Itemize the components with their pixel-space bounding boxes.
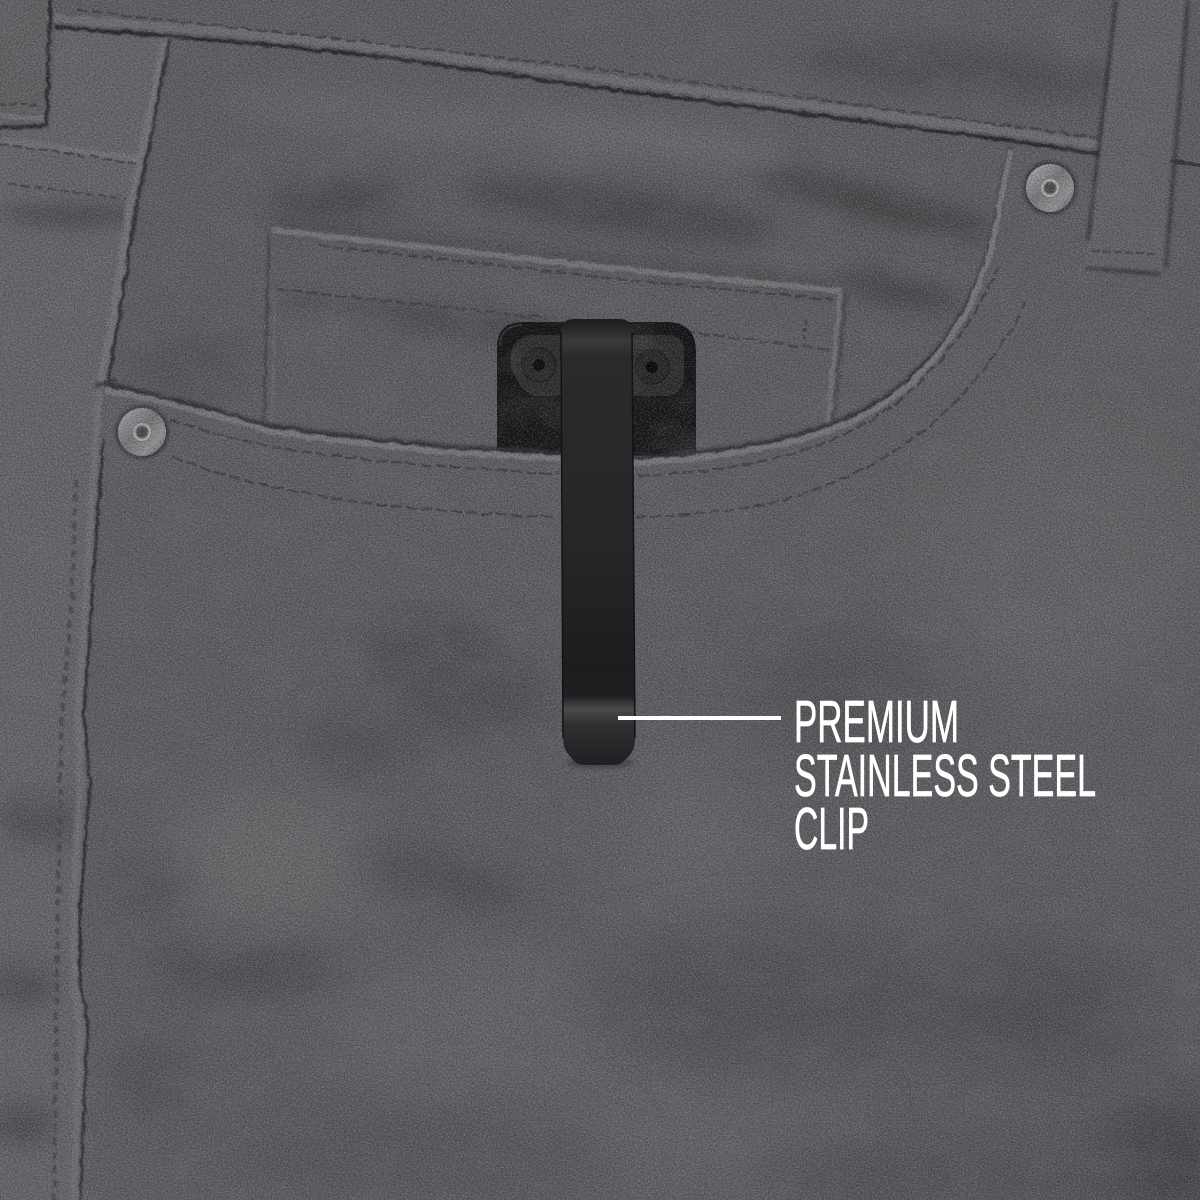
icon: pocket clip — [561, 319, 635, 769]
icon: left belt loop — [0, 0, 50, 128]
icon: right rivet — [1023, 161, 1077, 215]
panel: side seam — [0, 40, 170, 1200]
panel: coin pocket — [264, 224, 846, 425]
panel: left side panel — [0, 30, 168, 1200]
heading: callout label: CLIP — [794, 796, 869, 862]
heading: callout label: PREMIUM — [794, 689, 959, 755]
lower fabric light and dark patches — [110, 430, 1200, 1200]
icon: right belt loop — [1084, 0, 1188, 274]
panel: waistband seam — [54, 10, 1200, 165]
panel: hip pocket opening — [96, 147, 1200, 600]
heading: callout label — [794, 689, 1096, 862]
icon: leather holster — [497, 322, 696, 457]
callout: leader line — [618, 716, 781, 720]
upper fabric fold shadows — [130, 29, 1132, 399]
icon: left rivet — [115, 405, 169, 459]
